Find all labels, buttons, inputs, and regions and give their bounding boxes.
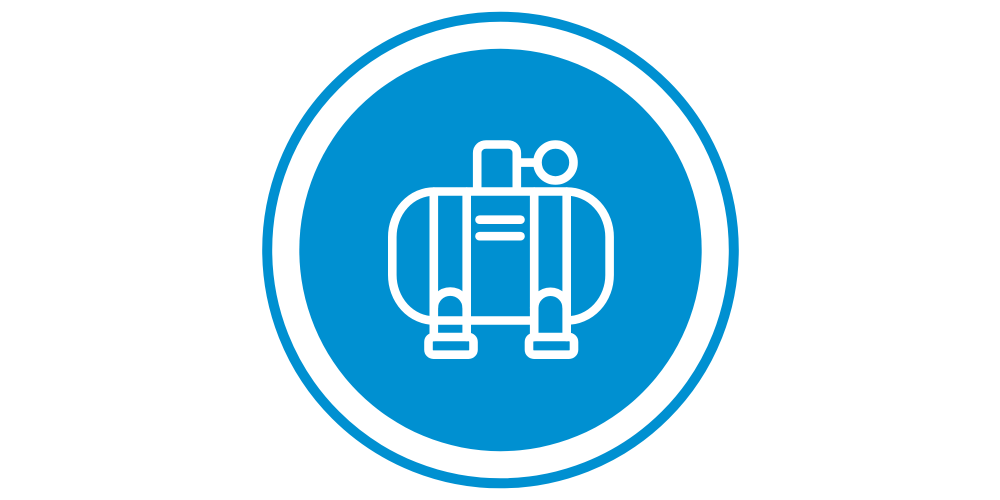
inner disc — [299, 49, 702, 451]
pressure gauge — [538, 144, 574, 180]
outer ring — [267, 17, 734, 483]
label lines — [480, 220, 520, 236]
right strap and foot — [529, 192, 574, 355]
left strap and foot — [428, 192, 474, 355]
top housing — [477, 144, 517, 188]
tank body — [392, 192, 610, 320]
icon: pressure tank — [392, 144, 610, 355]
connector — [517, 158, 537, 167]
